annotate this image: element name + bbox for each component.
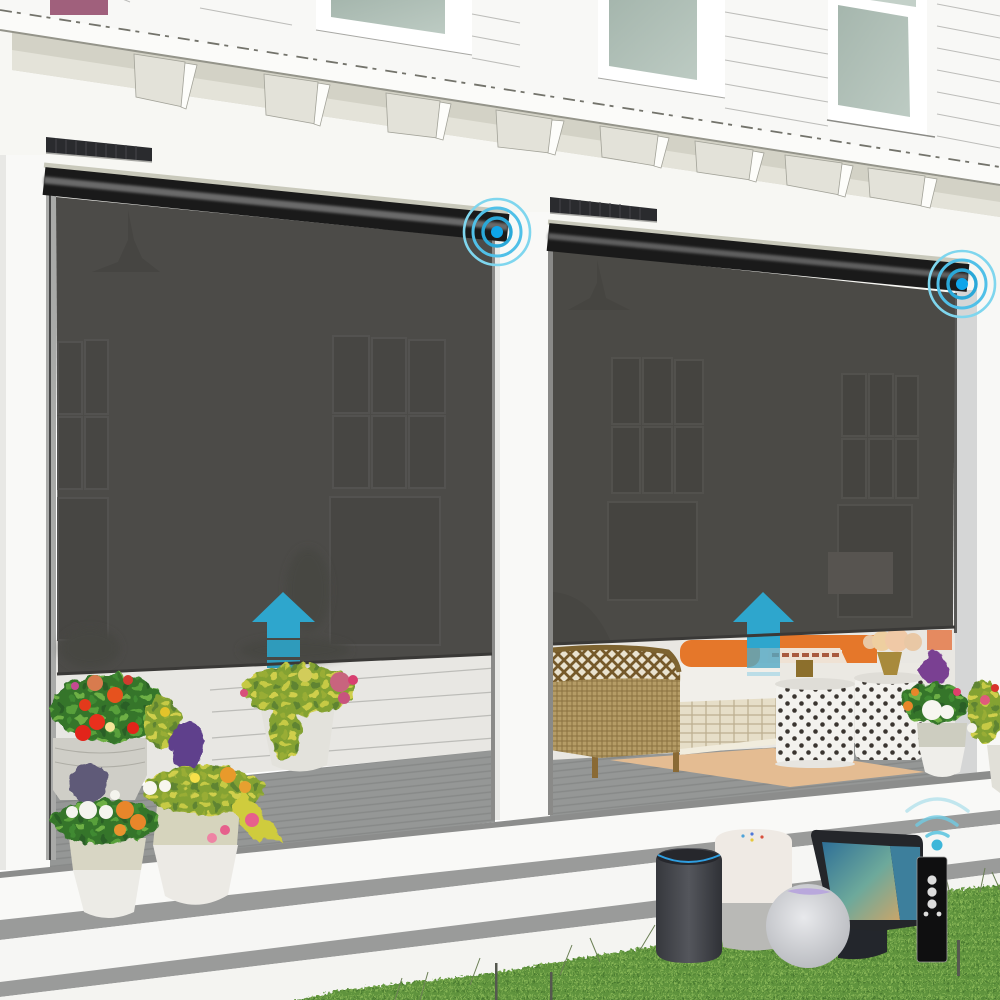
windows on the upper floor xyxy=(316,0,935,137)
solar panel: left xyxy=(46,137,152,162)
planter: far right edge xyxy=(987,745,1000,793)
deck floor, left bay xyxy=(50,750,495,872)
porch interior wall, left bay xyxy=(50,640,495,790)
porch roof edge xyxy=(0,10,1000,185)
tread 3 xyxy=(0,858,1000,997)
wicker chair xyxy=(550,647,680,778)
planter plants: small front xyxy=(51,763,159,844)
right stool xyxy=(854,672,924,760)
roller housing: left xyxy=(44,165,508,228)
ghost chair, right shade xyxy=(553,592,610,645)
window: far left xyxy=(50,0,108,15)
planter plants: right xyxy=(901,652,1000,744)
sofa with orange cushions xyxy=(680,630,952,755)
ghost pendant lamp, right shade xyxy=(568,260,630,310)
ghost plants, left shade xyxy=(60,548,350,668)
guide tracks xyxy=(46,195,957,860)
planter plants: large front xyxy=(143,721,285,843)
lawn xyxy=(262,884,1000,1000)
step riser 3 xyxy=(0,873,1000,1000)
planter: large front xyxy=(153,806,240,905)
tread 2 xyxy=(0,810,1000,940)
deck floor, right bay xyxy=(550,735,1000,822)
solar panel: right xyxy=(550,197,657,222)
remote control xyxy=(917,857,947,962)
ghost window reflection, right shade xyxy=(608,358,918,617)
planter: bay xyxy=(260,706,335,772)
up arrow: left xyxy=(252,592,315,668)
ghost table lamp, right shade xyxy=(828,552,893,594)
smart speaker: white sphere xyxy=(766,884,850,968)
rug xyxy=(610,748,925,787)
up arrow: right xyxy=(733,592,794,676)
smart speaker: dark cylinder xyxy=(656,848,722,963)
smart speaker: white xyxy=(715,829,792,951)
flower vase on stool xyxy=(863,628,922,675)
tread 1 xyxy=(0,770,1000,878)
planter: right xyxy=(917,723,967,777)
porch interior wall, right bay xyxy=(550,620,960,770)
shade hem bars xyxy=(57,627,955,674)
shade panel: left xyxy=(56,197,492,675)
wifi icon xyxy=(907,799,968,850)
signal rings: left xyxy=(464,199,530,265)
roller housing: right xyxy=(548,222,968,278)
lawn stakes xyxy=(495,940,960,1000)
planter: top left on deck xyxy=(53,738,147,800)
siding lines in left bay xyxy=(210,668,495,760)
ghost window reflection, left shade xyxy=(58,336,445,645)
planter: small front xyxy=(69,838,146,918)
posts xyxy=(0,155,1000,870)
signal rings: right xyxy=(929,251,995,317)
house siding wall xyxy=(0,0,1000,210)
smart display xyxy=(811,830,923,959)
left stool xyxy=(775,660,855,768)
grass wisps xyxy=(395,868,1000,1000)
planter plants: bay xyxy=(240,665,358,760)
step riser 2 xyxy=(0,824,1000,984)
ghost pendant lamp, left shade xyxy=(92,210,160,272)
shade panel: right xyxy=(553,250,955,645)
porch beam xyxy=(0,30,1000,300)
step riser 1 xyxy=(0,776,1000,925)
soffit shadow band xyxy=(12,32,1000,217)
rafters xyxy=(134,54,937,208)
planter plants: top left xyxy=(50,674,180,748)
